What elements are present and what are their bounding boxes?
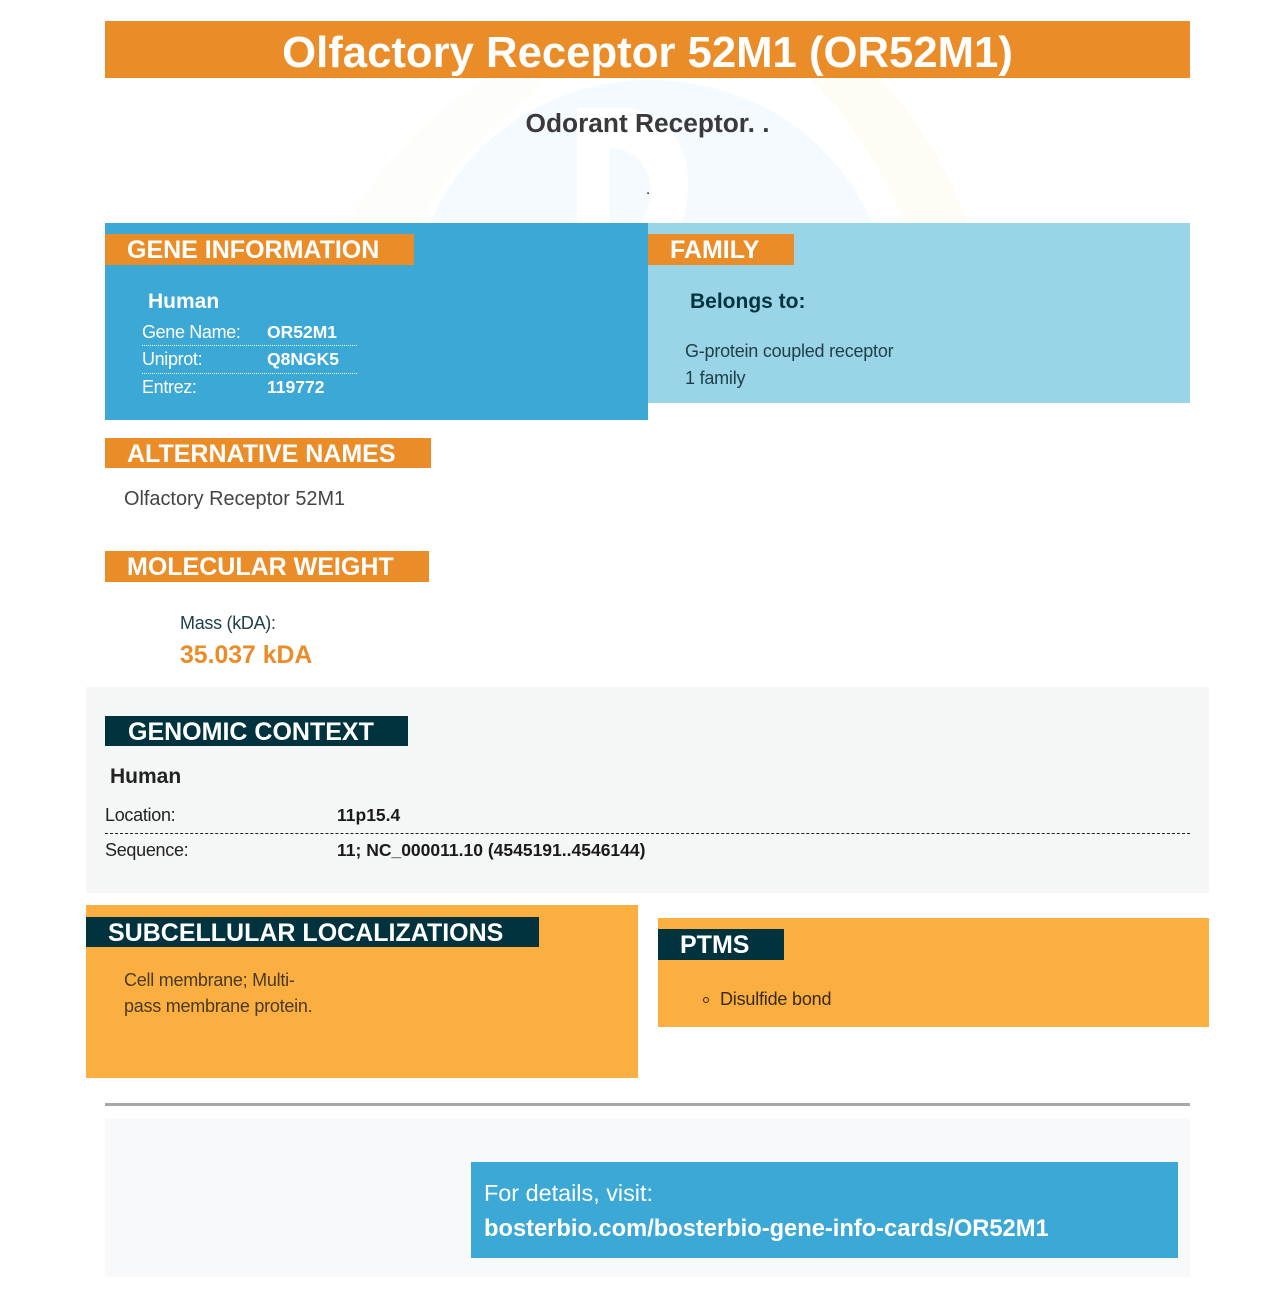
callout: details link <box>471 1162 1178 1258</box>
row: sequence <box>105 840 645 860</box>
panel: footer <box>105 1118 1190 1277</box>
mass label: Mass (kDA): <box>180 613 276 633</box>
heading: gene information: GENE INFORMATION <box>127 236 379 264</box>
row: uniprot <box>142 346 357 374</box>
row: gene name <box>142 318 357 346</box>
belongs to label: Belongs to: <box>690 290 806 313</box>
family description <box>685 341 894 388</box>
row: entrez: Entrez: <box>142 377 197 397</box>
heading: alternative names: ALTERNATIVE NAMES <box>127 440 396 468</box>
heading: family: FAMILY <box>670 236 759 264</box>
localization text: Cell membrane; Multi- <box>124 970 295 990</box>
title banner <box>105 21 1190 78</box>
species label: Human <box>148 290 219 313</box>
panel: ptms <box>658 918 1209 1027</box>
heading: subcellular localizations: SUBCELLULAR LOCALIZATIONS <box>108 919 503 947</box>
small dot text: . <box>646 181 650 198</box>
alternative names text: Olfactory Receptor 52M1 <box>124 488 345 510</box>
row: location <box>105 799 1190 834</box>
ptm text: Disulfide bond <box>720 989 831 1009</box>
family description: 1 family <box>685 368 745 388</box>
row: sequence: 11; NC_000011.10 (4545191..4546144) <box>337 840 645 860</box>
heading: genomic context: GENOMIC CONTEXT <box>128 718 374 746</box>
callout intro: For details, visit: <box>484 1180 653 1206</box>
mass value: 35.037 kDA <box>180 642 312 669</box>
localization text: pass membrane protein. <box>124 996 312 1016</box>
row: gene name: OR52M1 <box>267 322 337 342</box>
divider <box>105 1103 1190 1106</box>
row: uniprot: Uniprot: <box>142 349 202 369</box>
heading: family <box>648 234 794 265</box>
heading: ptms: PTMS <box>680 931 749 959</box>
row: location: Location: <box>105 805 175 825</box>
family description: G-protein coupled receptor <box>685 341 893 361</box>
panel: gene information <box>105 223 648 420</box>
subtitle: Odorant Receptor. . <box>525 108 770 138</box>
panel: subcellular localizations <box>86 905 638 1078</box>
row: location: 11p15.4 <box>337 805 400 825</box>
callout url: bosterbio.com/bosterbio-gene-info-cards/OR52M1 <box>484 1216 1049 1242</box>
heading: molecular weight: MOLECULAR WEIGHT <box>127 553 394 581</box>
species label: Human <box>110 765 181 788</box>
row: entrez: 119772 <box>267 377 324 397</box>
title banner: Olfactory Receptor 52M1 (OR52M1) <box>282 28 1013 77</box>
panel: family <box>648 223 1190 403</box>
localization text <box>124 970 312 1016</box>
panel: genomic context <box>86 687 1209 893</box>
bullet <box>703 997 709 1003</box>
row: entrez <box>142 377 324 397</box>
row: uniprot: Q8NGK5 <box>267 349 339 369</box>
row: gene name: Gene Name: <box>142 322 241 342</box>
row: sequence: Sequence: <box>105 840 188 860</box>
background watermark logo <box>430 78 968 223</box>
heading: ptms <box>658 929 784 960</box>
